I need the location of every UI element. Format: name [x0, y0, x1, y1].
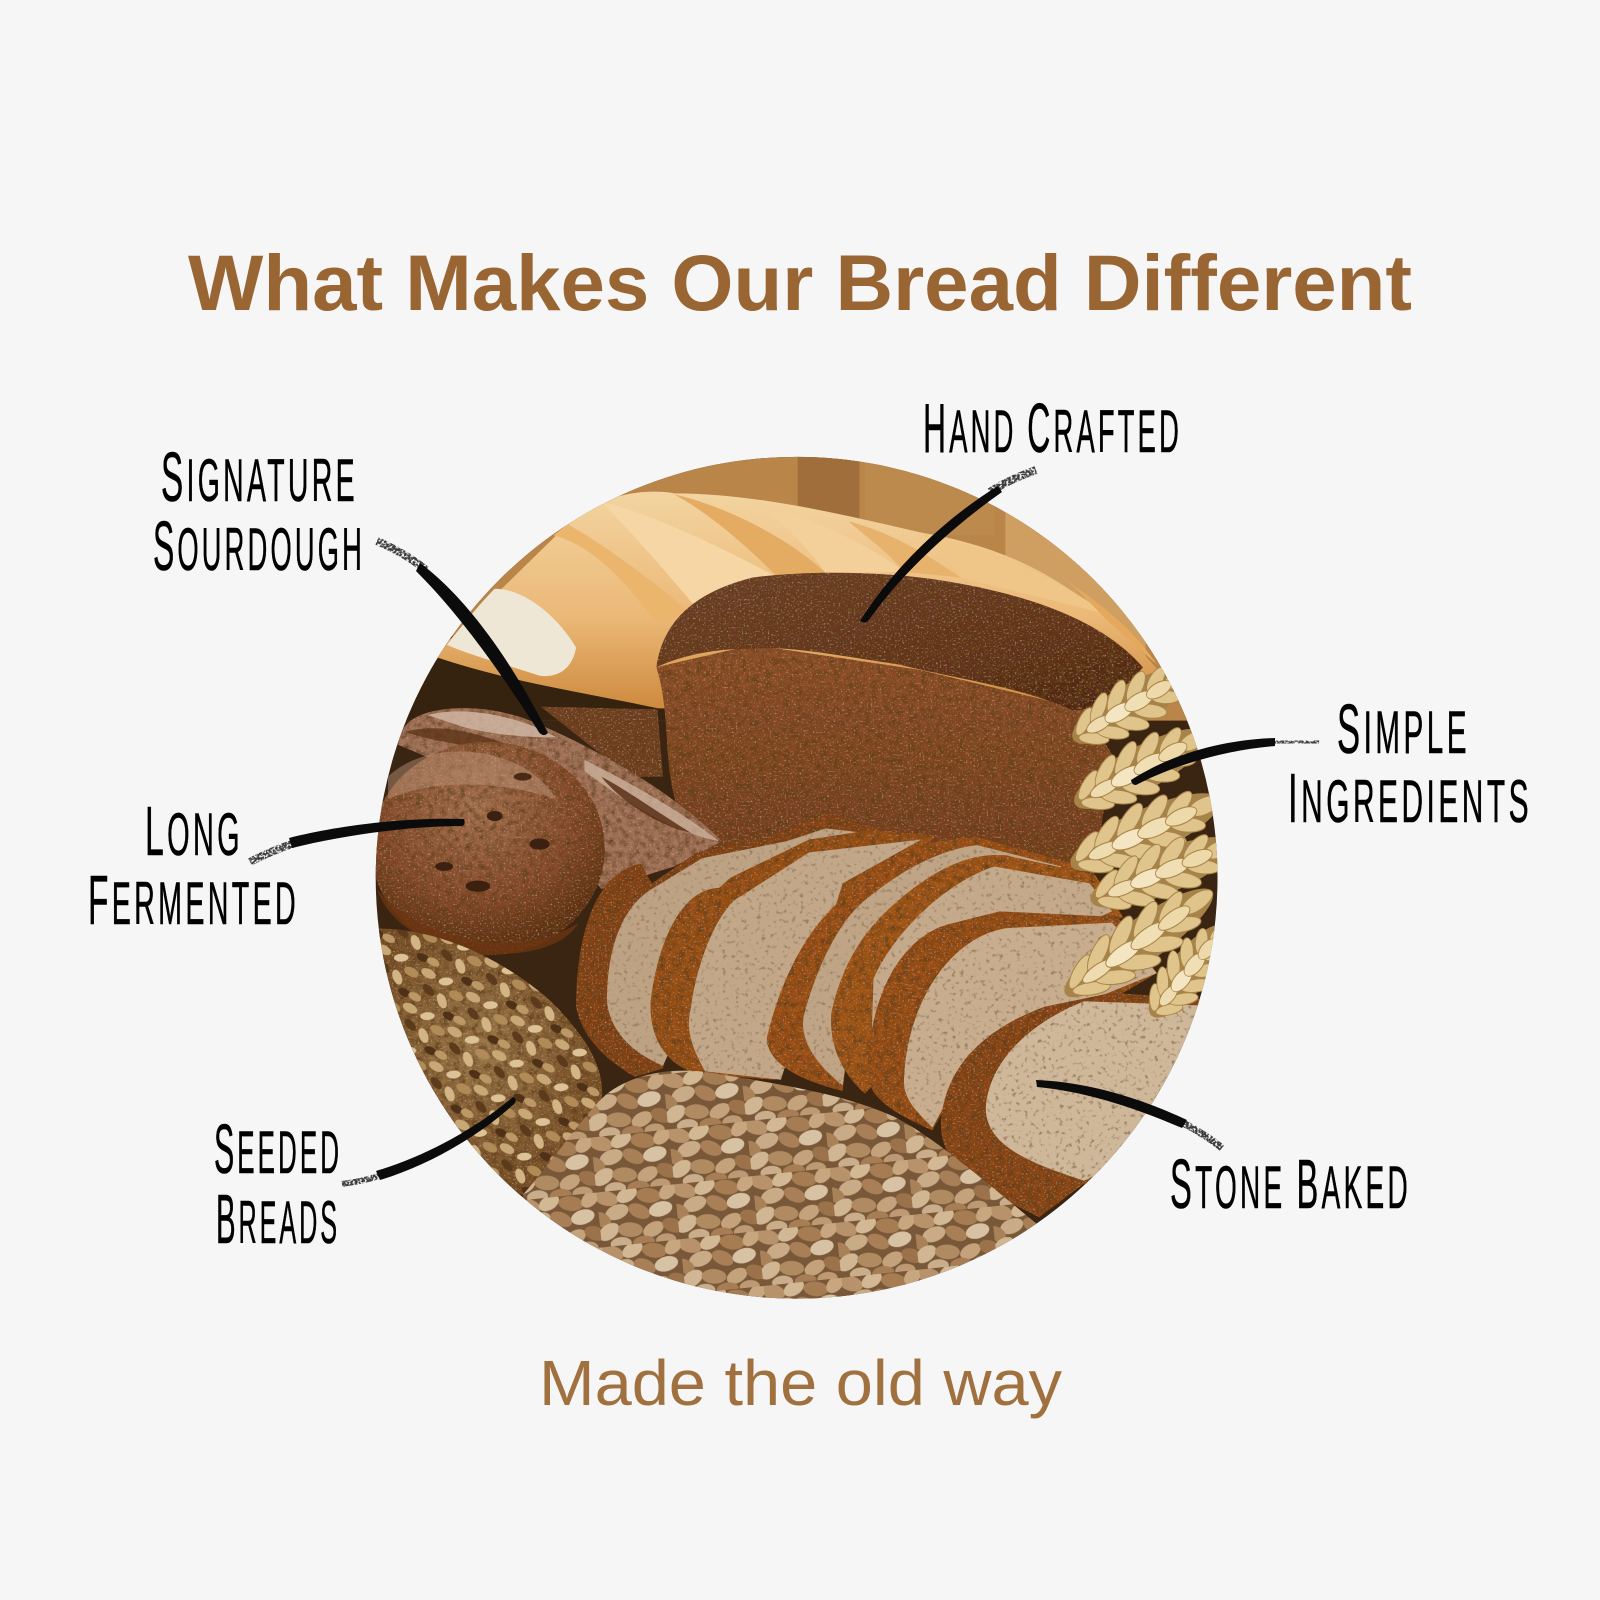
text: BREADS	[216, 1180, 340, 1258]
slice 3	[767, 837, 1084, 1091]
dark rye loaf	[656, 573, 1143, 906]
arrow: signature sourdough	[377, 541, 548, 735]
title: What Makes Our Bread Different	[188, 238, 1412, 327]
label: stone baked: STONE BAKED	[1170, 1145, 1411, 1223]
tagline: Made the old way	[539, 1347, 1062, 1419]
label: hand crafted: HAND CRAFTED	[923, 389, 1182, 467]
arrow: hand crafted	[860, 470, 1036, 622]
arrow: simple ingredients	[1131, 738, 1319, 785]
slice 6	[940, 993, 1200, 1218]
label: long fermented	[88, 792, 299, 939]
slice 2	[651, 830, 938, 1080]
label: simple ingredients	[1288, 690, 1532, 837]
label: long fermented: LONG	[145, 792, 243, 870]
label: seeded breads	[214, 1110, 342, 1258]
slice 1	[576, 813, 882, 1077]
text: SEEDED	[214, 1110, 342, 1188]
grain pile	[522, 1070, 1036, 1299]
label: signature sourdough: SIGNATURE	[161, 438, 358, 516]
arrow: stone baked	[1036, 1080, 1222, 1148]
bread slices	[576, 813, 1235, 1217]
wood background	[360, 440, 1240, 1320]
exposed white crumb	[447, 589, 576, 676]
seeded loaf	[360, 929, 602, 1195]
round seeded roll	[371, 742, 605, 955]
floured loaf behind roll	[394, 707, 722, 889]
text: SOURDOUGH	[153, 507, 365, 585]
wheat ears	[1064, 666, 1218, 1018]
slice 4	[831, 855, 1123, 1094]
baguette	[433, 492, 1163, 721]
label: signature sourdough	[153, 438, 365, 585]
photo: circular bread still life	[376, 456, 1218, 1299]
slice 5	[868, 911, 1157, 1130]
label: simple ingredients: SIMPLE	[1337, 690, 1470, 768]
arrow: seeded breads	[342, 1097, 516, 1184]
label: long fermented: FERMENTED	[88, 861, 299, 939]
arrow: long fermented	[250, 819, 465, 862]
